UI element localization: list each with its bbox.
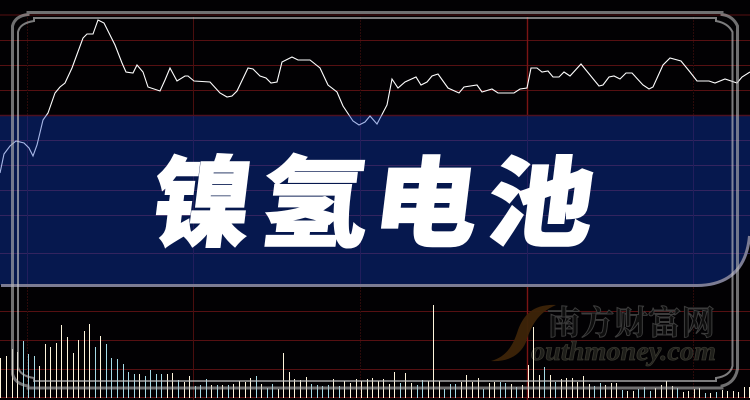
- title: 镍: [145, 125, 261, 267]
- panel: navy title band: [0, 115, 750, 286]
- bar chart: volume bars: [0, 305, 750, 398]
- icon: swoosh S: [491, 305, 556, 361]
- watermark: southmoney logo: [491, 297, 716, 366]
- line chart: price curve: [0, 20, 750, 173]
- watermark text: Chinese site name: 南方财富网: [547, 297, 715, 344]
- title: 电: [366, 125, 488, 267]
- title: 池: [480, 125, 604, 267]
- watermark text: domain: outhmoney.com: [531, 336, 716, 366]
- title: 氢: [254, 124, 379, 266]
- title: [145, 124, 604, 267]
